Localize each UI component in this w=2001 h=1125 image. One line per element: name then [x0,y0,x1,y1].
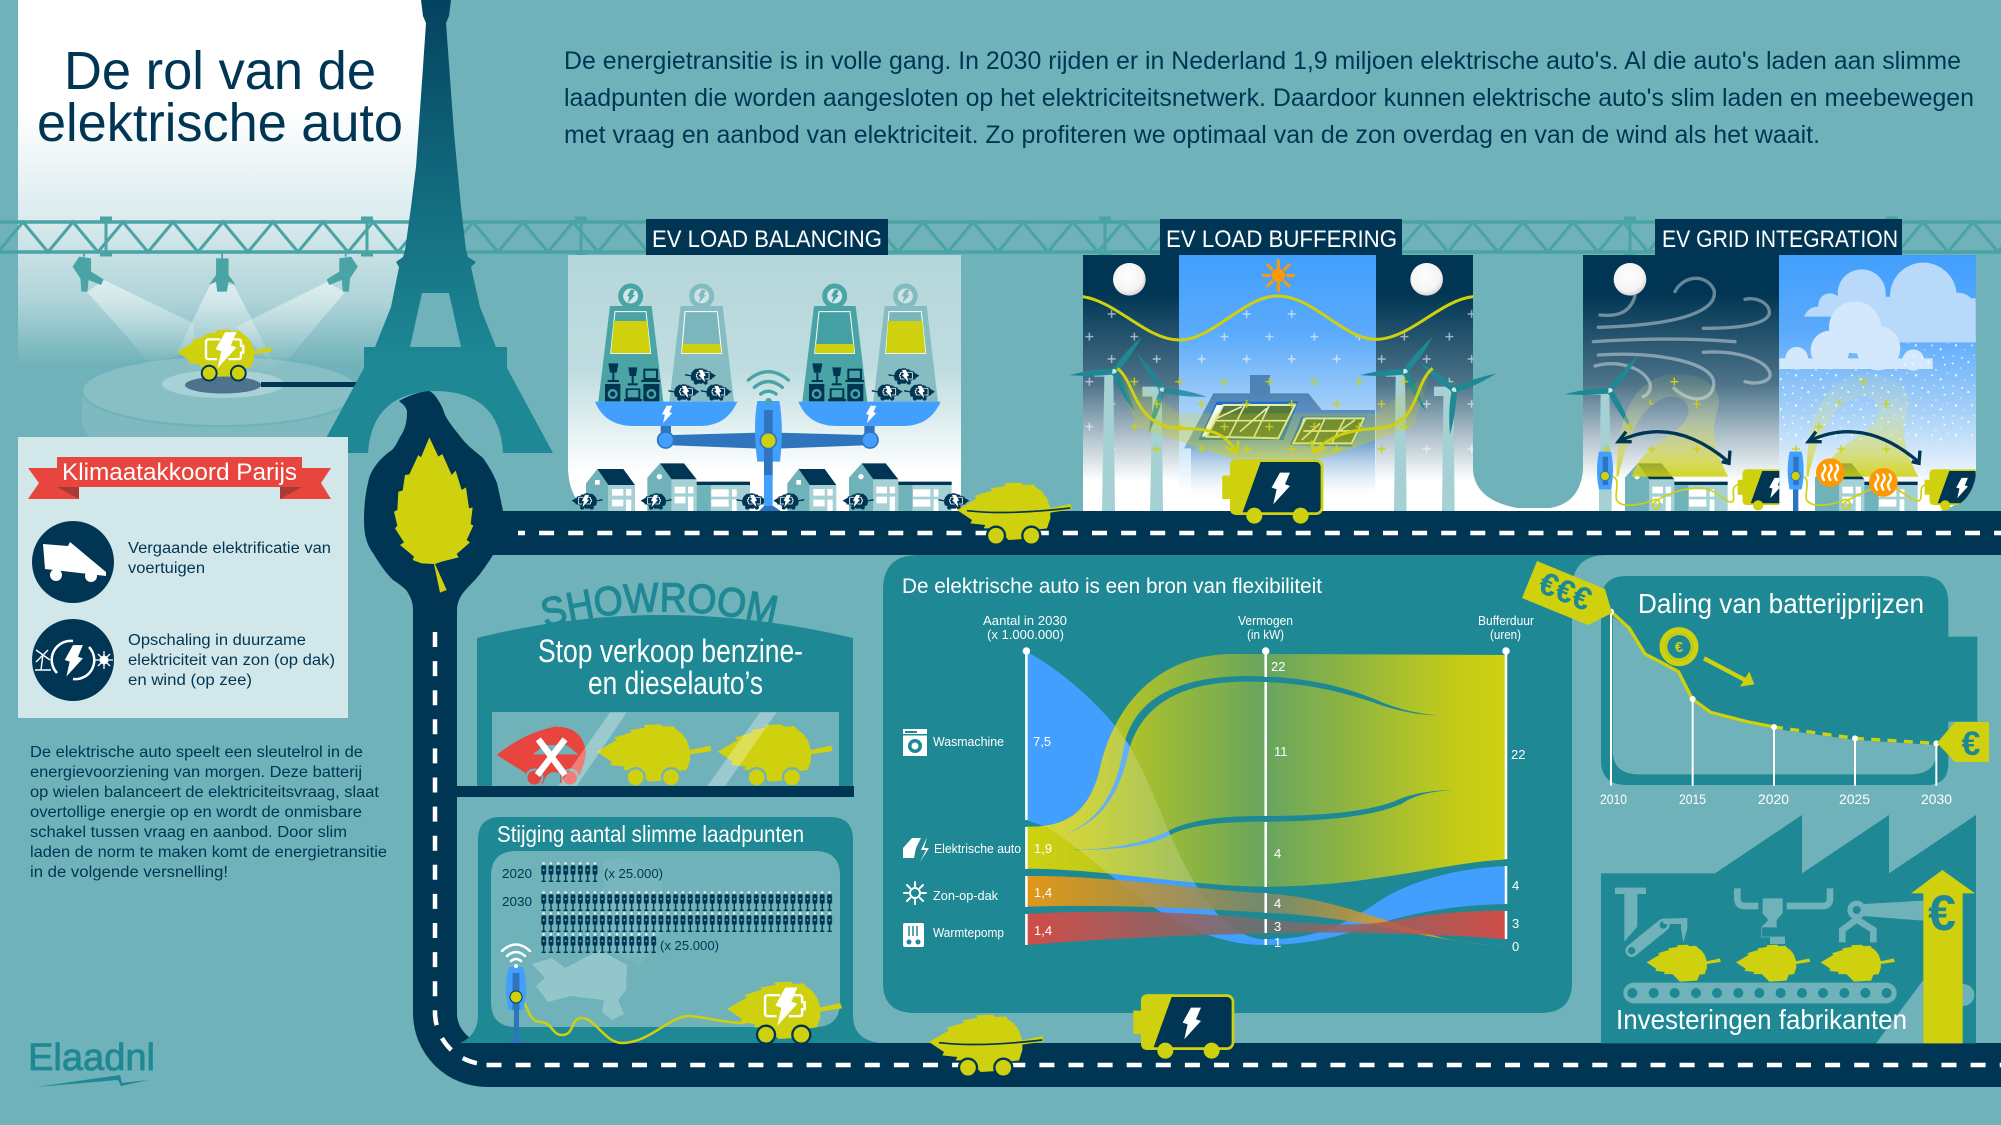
EV grid integration illustration [1565,263,1988,512]
text: renewable: Opschaling in duurzame [128,632,306,649]
road vehicles upper [957,459,1322,545]
chart values: 1 [1274,935,1281,950]
year labels: (x 25.000) [604,867,663,881]
ribbon [28,457,331,499]
house with solar panels [1184,375,1375,500]
body paragraph: De elektrische auto speelt een sleutelrol in de [30,744,363,761]
map of the Netherlands [532,858,664,1020]
year labels: 2030 [1921,792,1952,807]
crossed-out petrol car [497,727,586,786]
year labels: 2020 [502,867,532,881]
clouds [1779,263,1976,371]
tower window [410,293,461,347]
intro text [564,47,1974,149]
houses [1625,463,1918,512]
sankey flows [1026,652,1506,946]
charging cable [516,997,745,1043]
text: electrification: Vergaande elektrificatie van [128,540,331,557]
data points [1608,609,1939,746]
spotlight stage [72,252,360,442]
price tag: low: € [1962,725,1981,763]
crossing highlight [1044,726,1194,882]
battery van [1222,459,1322,524]
wind swirls [1593,278,1770,399]
leaf car charging [727,982,842,1044]
energy glow right [1807,374,1918,477]
platform [82,356,360,442]
category labels: Zon-op-dak [933,889,999,903]
flow: rooftop solar [1026,876,1506,946]
chart values [1033,659,1525,954]
column headers: (uren) [1490,628,1521,642]
panel: title stage backdrop [18,0,436,430]
chart values: 4 [1512,878,1519,893]
flow arrows to van [1117,368,1433,453]
section labels [646,219,1902,255]
body paragraph: laden de norm te maken komt de energietransitie [30,844,387,861]
price tag: high [1522,561,1612,625]
column headers: Bufferduur [1478,614,1534,628]
chart heading: De elektrische auto is een bron van flexibiliteit [902,575,1322,598]
charger [502,944,530,1043]
Eiffel tower [318,0,553,453]
showroom cars [497,712,833,786]
year labels [1600,792,1952,807]
year markers [1611,612,1936,786]
showroom heading: Stop verkoop benzine- [538,633,803,669]
flow: heat pump [1026,911,1506,945]
chart values: 4 [1274,846,1281,861]
electric car 2 [718,724,833,786]
showroom building [477,615,853,787]
column headers: (x 1.000.000) [987,628,1064,642]
year labels [502,867,719,953]
text: electrification [128,540,331,577]
year labels: 2020 [1758,792,1789,807]
ribbon: Klimaatakkoord Parijs [62,459,297,486]
arrow euro: € [1928,885,1956,941]
year labels: 2025 [1839,792,1870,807]
category labels: Warmtepomp [933,926,1004,940]
energy glow left [1617,374,1728,477]
leaf in road roundabout [394,437,473,593]
panel: EV load strip base [568,255,961,512]
panel: factory [1601,815,1976,1043]
icon: sun [904,882,926,904]
wifi icon [748,372,788,403]
column headers [983,614,1534,642]
category labels [933,735,1021,940]
body paragraph: schakel tussen vraag en aanbod. Door slim [30,824,347,841]
flow: electric car [1026,654,1506,887]
factory building [1601,815,1976,1043]
conveyor belt [1623,983,1897,1003]
body paragraph [30,744,387,881]
exchange arrows [1618,432,1920,463]
road markings [435,533,2001,1065]
leaf car [929,1015,1044,1077]
chart values: 1,4 [1034,885,1052,900]
spotlight beams [87,280,345,373]
showroom floor [457,786,854,797]
label: EV grid integration [1655,219,1902,255]
factory machinery [1615,888,1974,1043]
chart values: 11 [1274,744,1288,759]
title: elektrische auto [37,93,403,153]
label: EV load balancing: EV LOAD BALANCING [652,226,882,253]
panel: smart charge points [460,817,880,1044]
coin euro: € [1675,639,1684,656]
column headers: (in kW) [1247,628,1284,642]
label: EV grid integration: EV GRID INTEGRATION [1662,226,1898,253]
houses [586,463,952,512]
logo: Elaadnl: Elaadnl [28,1037,155,1079]
scale: EV load balancing illustration [572,286,969,512]
panel: battery price chart [1522,561,1989,807]
intro text: De energietransitie is in volle gang. In 2030 rijden er in Nederland 1,9 miljoen elektrische auto's. Al die auto's laden aan slimme [564,47,1961,75]
body paragraph: in de volgende versnelling! [30,864,228,881]
price tag: low [1937,722,1989,763]
chart values: 7,5 [1033,734,1051,749]
area under curve [1613,617,1936,774]
panel: right backdrop [1572,555,2001,1043]
showroom sign: SHOWROOM [542,582,778,624]
lighting truss [0,219,2001,254]
price curve [1611,612,1936,743]
leaves on belt [1647,945,1895,982]
chart background [1601,576,1977,785]
energy demand curve [1083,296,1473,340]
heating icons [1816,458,1898,497]
wind turbines [1069,333,1497,512]
showroom window [492,712,839,786]
column headers: Vermogen [1238,614,1293,628]
showroom heading [538,633,803,701]
chargers [1597,452,1804,512]
yellow plus marks [1603,378,1890,453]
icon: electric vehicle [32,521,114,603]
grid of plus marks [1083,297,1473,455]
panel: EV grid integration sky [1473,255,1976,512]
chart values: 0 [1512,939,1519,954]
body paragraph: overtollige energie op en wordt de onmisbare [30,804,362,821]
small leaf cars [572,368,969,510]
panel: climate agreement [18,437,348,718]
icon: renewable cycle [32,619,114,701]
chart values: 3 [1274,919,1281,934]
icon: washing machine [903,729,927,756]
panel: flexibility chart [883,555,1610,1013]
category labels: Elektrische auto [934,842,1021,856]
category labels: Wasmachine [933,735,1004,749]
chart values: 1,4 [1034,923,1052,938]
battery vans [1738,469,1988,511]
panel: EV load buffering sky [1083,255,1473,512]
body paragraph: op wielen balanceert de elektriciteitsvraag, slaat [30,784,380,801]
year labels: 2015 [1679,792,1706,807]
coin and arrow [1662,630,1754,687]
chart values: 1,9 [1034,841,1052,856]
battery van [1222,459,1322,524]
turbine [1565,352,1640,512]
text: renewable: elektriciteit van zon (op dak) [128,652,335,669]
leaf car [957,483,1072,545]
weights [598,286,938,402]
year labels: 2030 [502,895,532,909]
spotlights [72,252,358,292]
strip gap blocks [961,255,1583,508]
factory heading: Investeringen fabrikanten [1616,1004,1907,1035]
energy glow [1117,368,1433,458]
sparkle dots [1780,369,1975,444]
showroom heading: en dieselauto’s [588,665,763,701]
EV load buffering illustration [1069,261,1497,524]
heading: Daling van batterijprijzen [1638,588,1924,619]
yellow plus marks [1128,375,1410,455]
text: electrification: voertuigen [128,560,205,577]
column headers: Aantal in 2030 [983,614,1067,628]
chart values: 22 [1511,747,1525,762]
year labels: (x 25.000) [660,939,719,953]
road vehicles lower [929,994,1233,1077]
chart values: 3 [1512,916,1519,931]
intro text: met vraag en aanbod van elektriciteit. Zo profiteren we optimaal van de zon overdag en van de wind als het waait. [564,121,1820,149]
text: renewable [128,632,335,689]
investment arrow [1911,870,1975,1043]
icon: heat pump [903,923,924,947]
sun [1263,261,1293,291]
moons [1113,263,1443,296]
glass reflections [558,712,777,786]
label: EV load buffering: EV LOAD BUFFERING [1166,226,1397,253]
chart values: 4 [1274,896,1281,911]
chart values: 22 [1271,659,1285,674]
charger pictogram rows [540,862,834,953]
title [37,41,403,153]
charging cables [1605,476,1930,509]
electric car 1 [597,724,712,786]
main road [364,391,2001,1065]
text: renewable: en wind (op zee) [128,672,252,689]
flow: washing machine [1026,652,1506,945]
intro text: laadpunten die worden aangesloten op het elektriciteitsnetwerk. Daardoor kunnen elektrische auto's slim laden en meebewegen [564,84,1974,112]
moon [1614,263,1646,296]
chart axes [1024,648,1508,945]
battery van [1133,994,1233,1059]
icon: electric car [903,837,929,862]
heading: Stijging aantal slimme laadpunten [497,821,804,847]
body paragraph: energievoorziening van morgen. Deze batterij [30,764,362,781]
price tag: high: €€€ [1534,564,1597,618]
title: De rol van de [64,41,376,101]
panel: showroom [457,582,854,797]
leaf car on stage [177,329,272,381]
year labels: 2010 [1600,792,1627,807]
balance beam [595,401,941,512]
